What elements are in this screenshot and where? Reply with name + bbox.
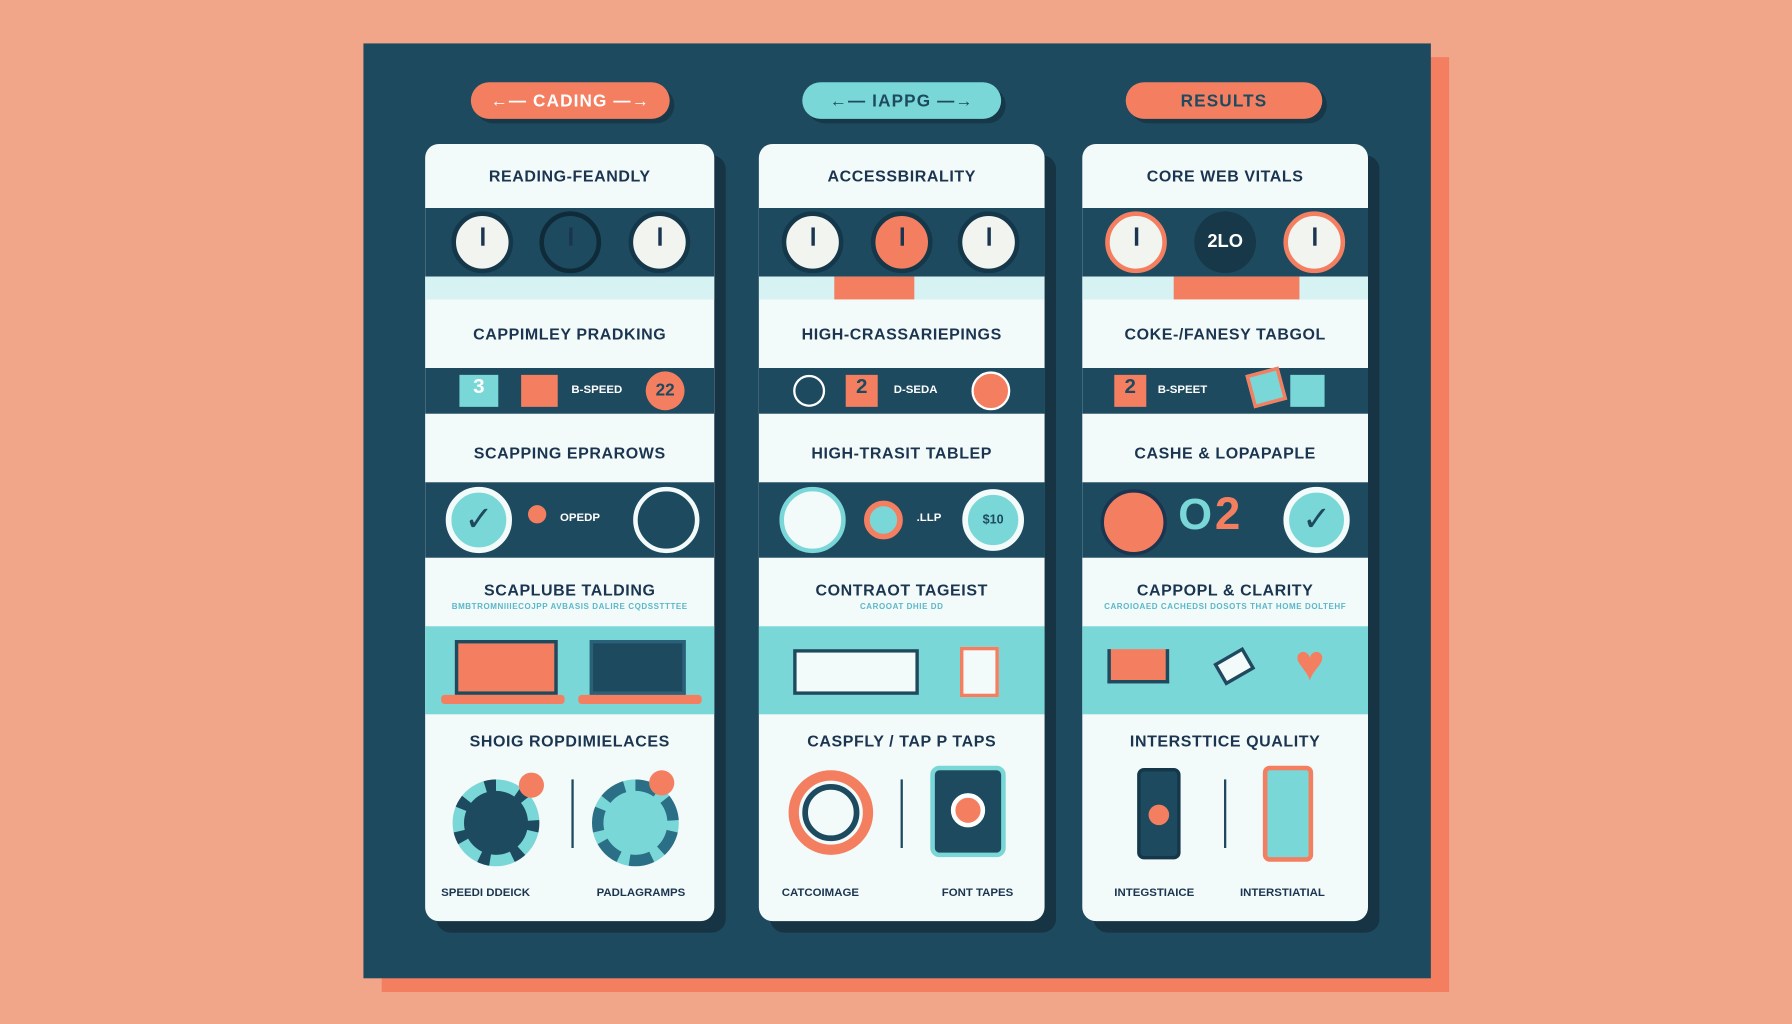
check band — [425, 482, 714, 558]
speed band — [425, 368, 714, 414]
panel: column 2: CATCOIMAGE — [782, 887, 859, 899]
heading: CASPFLY / TAP P TAPS — [807, 731, 996, 750]
speed band: 2 — [1125, 375, 1136, 398]
icons band: $10 — [983, 513, 1004, 527]
heading: CORE WEB VITALS — [1147, 167, 1303, 185]
header pill: cading — [471, 82, 670, 119]
gauges band — [425, 208, 714, 277]
header pill: results: RESULTS — [1181, 91, 1267, 110]
icons band: O — [1178, 491, 1212, 539]
panel: column 2: CAROOAT DHIE DD — [860, 603, 943, 611]
board — [363, 43, 1431, 978]
check band: ✓ — [464, 501, 493, 538]
heading: CAPPIMLEY PRADKING — [473, 325, 666, 343]
heading: HIGH-TRASIT TABLEP — [811, 443, 992, 462]
panel: column 1: SPEEDI DDEICK — [441, 887, 530, 899]
panel: column 2: FONT TAPES — [942, 887, 1013, 899]
panel: column 1 — [425, 144, 714, 921]
gauges band: 2LO — [1207, 232, 1243, 251]
laptops band — [425, 626, 714, 714]
gauges band — [759, 208, 1045, 277]
panel: column 3 — [1082, 144, 1368, 921]
speed band — [759, 368, 1045, 414]
heading: CAPPOPL & CLARITY — [1137, 581, 1313, 599]
gears — [453, 779, 539, 866]
heading: ACCESSBIRALITY — [827, 167, 976, 185]
shelf band — [759, 626, 1045, 714]
speed band: 2 — [856, 375, 867, 398]
heading: CASHE & LOPAPAPLE — [1134, 443, 1316, 462]
speed band: B-SPEED — [571, 384, 622, 397]
panel: column 3: INTERSTIATIAL — [1240, 887, 1325, 899]
panel: column 1: PADLAGRAMPS — [597, 887, 685, 899]
icons band — [759, 482, 1045, 558]
cart band — [1082, 626, 1368, 714]
panel: column 1: BMBTROMNIIIECOJPP AVBASIS DALIRE CQDSSTTTEE — [452, 603, 688, 611]
heading: COKE-/FANESY TABGOL — [1124, 325, 1326, 343]
heading: HIGH-CRASSARIEPINGS — [802, 325, 1002, 343]
phones — [1137, 768, 1181, 859]
panel: column 3: INTEGSTIAICE — [1114, 887, 1194, 899]
icons — [789, 770, 873, 855]
heading: SCAPLUBE TALDING — [484, 581, 655, 599]
heading: SHOIG ROPDIMIELACES — [470, 731, 670, 750]
header pill: iappg — [802, 82, 1001, 119]
check band: OPEDP — [560, 512, 600, 525]
icons band: 2 — [1215, 489, 1240, 539]
speed band: 22 — [656, 381, 675, 400]
heading: INTERSTTICE QUALITY — [1130, 731, 1320, 750]
icons band: ✓ — [1302, 501, 1331, 538]
speed band: 3 — [473, 375, 485, 398]
header pill: iappg: ←— IAPPG —→ — [830, 91, 974, 110]
header pill: results — [1126, 82, 1322, 119]
gauges band — [1082, 208, 1368, 277]
heading: READING-FEANDLY — [489, 167, 651, 185]
header pill: cading: ←— CADING —→ — [491, 91, 650, 110]
cart band: ♥ — [1295, 635, 1325, 691]
panel: column 3: CAROIOAED CACHEDSI DOSOTS THAT HOME DOLTEHF — [1104, 603, 1346, 611]
icons band — [1082, 482, 1368, 558]
icons band: .LLP — [917, 512, 941, 525]
panel: column 2 — [759, 144, 1045, 921]
speed band: D-SEDA — [894, 384, 938, 397]
heading: CONTRAOT TAGEIST — [816, 581, 988, 599]
speed band — [1082, 368, 1368, 414]
heading: SCAPPING EPRAROWS — [474, 443, 666, 462]
speed band: B-SPEET — [1158, 384, 1207, 397]
